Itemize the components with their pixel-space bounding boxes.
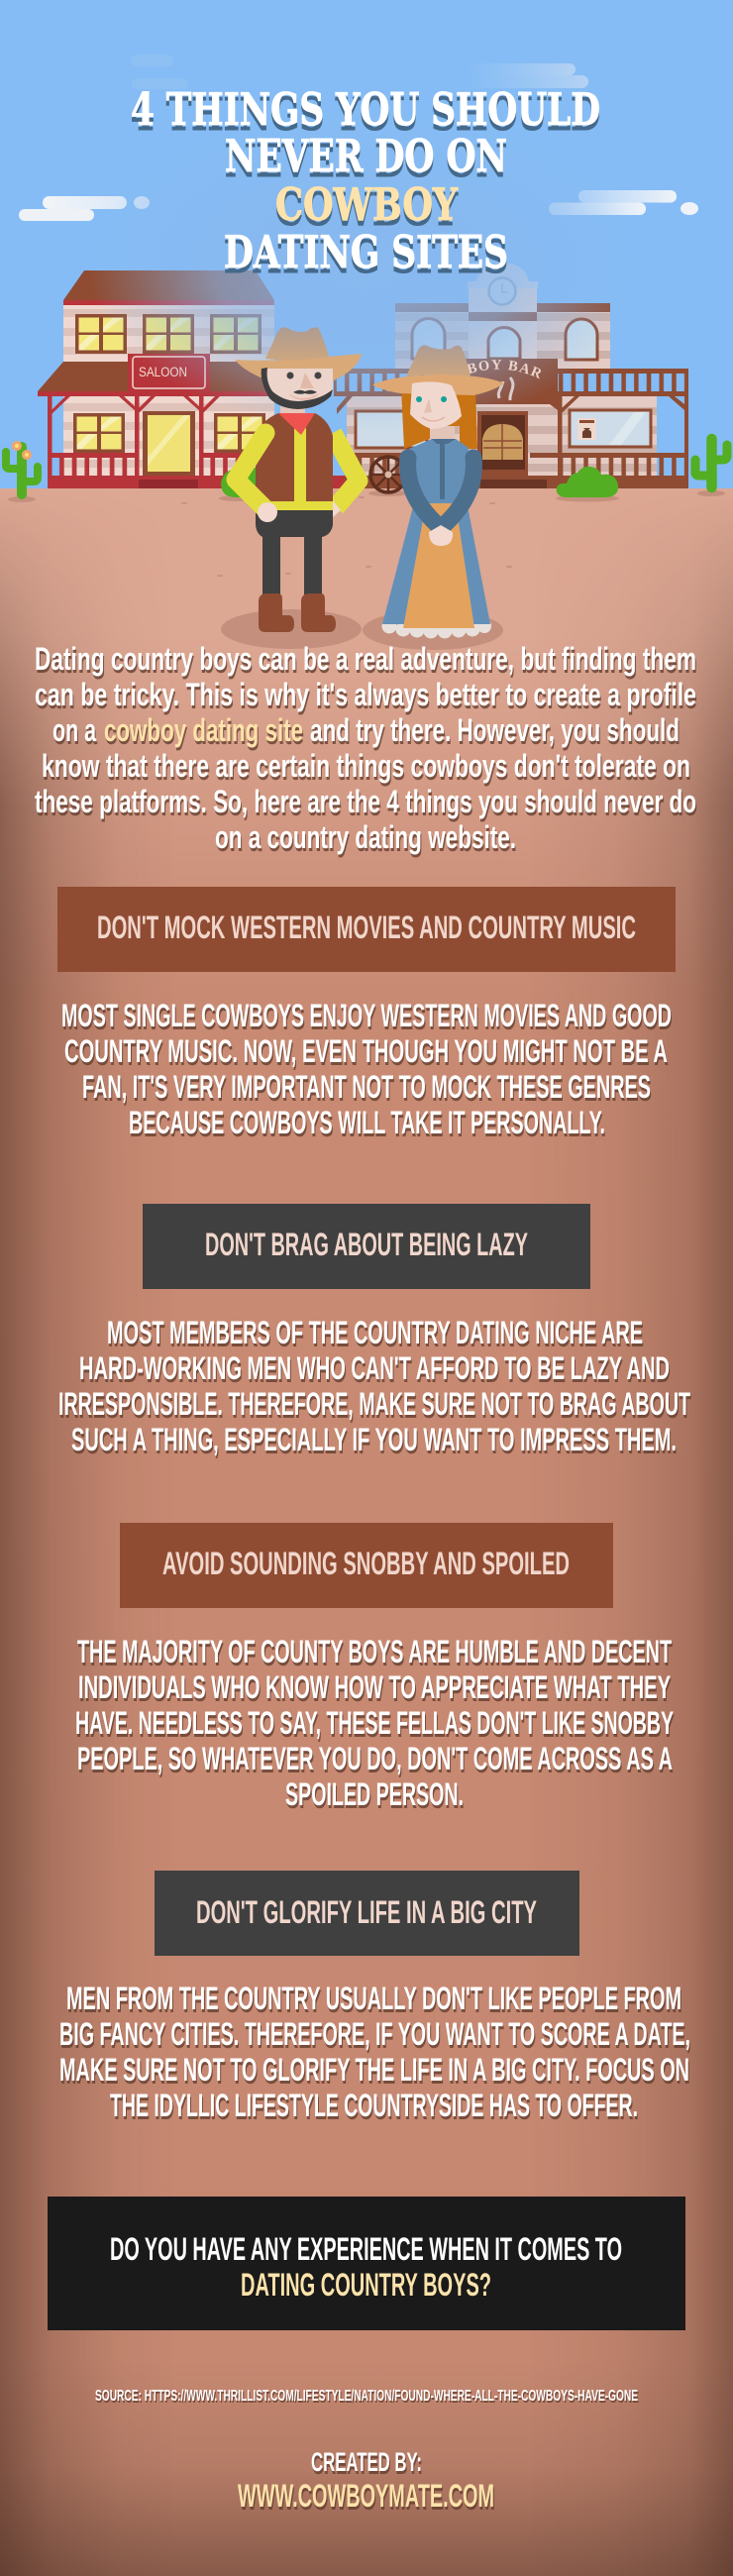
ground marks: [181, 496, 512, 577]
icon: right cactus: [695, 439, 727, 496]
dress hem: [382, 618, 491, 638]
background vignette bottom: [0, 2358, 733, 2576]
title: NEVER DO ON: [225, 130, 507, 182]
paragraph 1: [61, 998, 672, 1140]
title: [131, 83, 600, 278]
bar door: [477, 411, 528, 476]
title: 4 THINGS YOU SHOULD: [131, 83, 600, 136]
dress: [382, 495, 490, 624]
credits: WWW.COWBOYMATE.COM: [238, 2478, 494, 2514]
bar building: [334, 263, 688, 488]
bodice: [409, 439, 469, 499]
sleeves: [408, 458, 473, 527]
saloon sign: [128, 354, 210, 391]
hair: [401, 388, 477, 449]
torso: [256, 413, 333, 510]
paragraph 4: [59, 1981, 690, 2123]
cowgirl face: [410, 381, 462, 429]
bar sign: [466, 359, 558, 408]
cowgirl character: [363, 345, 504, 650]
icon: left cactus: [6, 441, 38, 502]
right arm: [333, 433, 359, 507]
left arm: [236, 433, 265, 509]
saloon sign: SALOON: [139, 365, 187, 379]
paragraph 3: [75, 1634, 674, 1812]
intro paragraph: [35, 641, 696, 855]
paragraph 3: SPOILED PERSON.: [285, 1776, 464, 1812]
cowboy head: [262, 368, 333, 409]
title: DATING SITES: [224, 226, 508, 278]
intro paragraph: on a: [52, 712, 96, 748]
icon: wagon wheel: [368, 457, 408, 496]
trousers: [256, 510, 333, 594]
heading box 1: [57, 887, 676, 972]
call to action box: DATING COUNTRY BOYS?: [241, 2267, 491, 2303]
heading box 4: DON'T GLORIFY LIFE IN A BIG CITY: [196, 1894, 537, 1930]
call to action box: [48, 2197, 685, 2330]
icon: clock: [489, 277, 515, 305]
intro paragraph: on a country dating website.: [215, 819, 516, 855]
wanted poster: [577, 418, 596, 440]
intro paragraph: cowboy dating site: [104, 712, 303, 748]
sky haze over town: [89, 104, 644, 431]
cowboy character: [221, 327, 362, 649]
saloon building: [38, 270, 345, 488]
cowgirl hat: [372, 345, 504, 395]
cowboy hat: [235, 327, 362, 380]
icon: left bush: [219, 468, 260, 501]
clouds: [19, 54, 698, 221]
icon: right bush: [556, 467, 619, 501]
bar sign lettering: COWBOY BAR: [443, 360, 541, 378]
heading box 3: [120, 1523, 613, 1608]
heading box 4: [155, 1871, 579, 1956]
title: COWBOY: [275, 178, 459, 231]
boots: [259, 593, 336, 632]
credits: CREATED BY:: [311, 2447, 422, 2477]
bar sign lettering: [443, 360, 541, 378]
heading box 2: [143, 1204, 590, 1289]
credits: [238, 2447, 494, 2514]
heading box 2: DON'T BRAG ABOUT BEING LAZY: [205, 1227, 528, 1262]
paragraph 2: [58, 1315, 690, 1457]
